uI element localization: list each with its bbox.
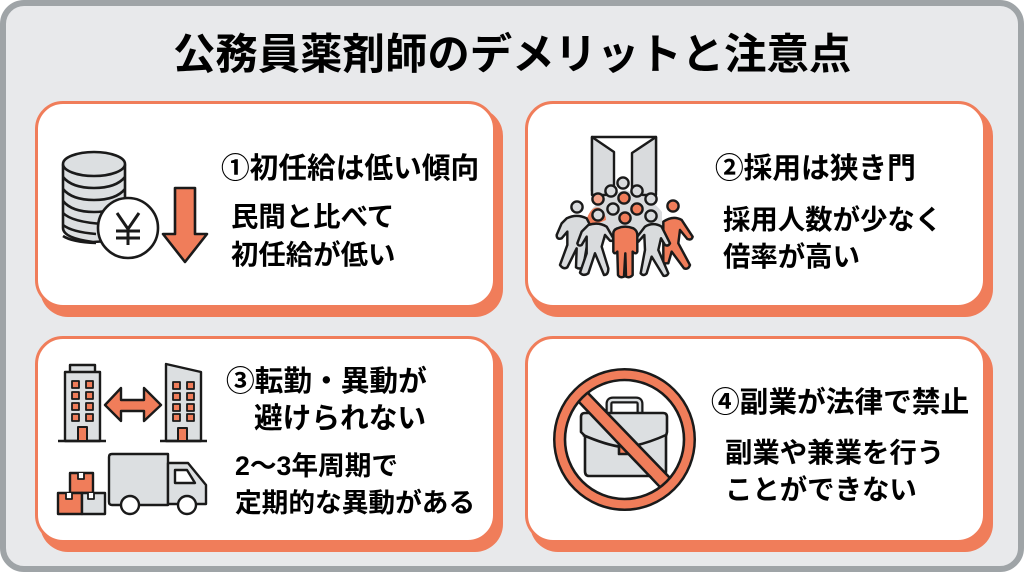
body text 3: 定期的な異動がある <box>235 488 475 518</box>
body text 1: 民間と比べて <box>231 201 394 232</box>
body text 4 <box>725 437 944 505</box>
card 3 shadow <box>40 343 503 552</box>
body text 2 <box>723 204 942 272</box>
body text 3: 2〜3年周期で <box>235 451 398 481</box>
heading 4: ④副業が法律で禁止 <box>711 387 969 419</box>
body text 2: 採用人数が少なく <box>723 204 942 235</box>
body text 4: 副業や兼業を行う <box>725 437 944 468</box>
card 1 <box>35 101 496 308</box>
heading 1: ①初任給は低い傾向 <box>221 153 479 185</box>
card 2 <box>525 101 986 308</box>
body text 1: 初任給が低い <box>231 239 395 270</box>
heading 3 <box>226 366 427 435</box>
body text 1 <box>231 201 395 270</box>
heading 2: ②採用は狭き門 <box>715 153 916 185</box>
card 2 shadow <box>530 108 993 317</box>
card 1 shadow <box>40 108 503 317</box>
heading 3: ③転勤・異動が <box>226 366 427 398</box>
card 3 <box>35 336 496 543</box>
heading 3: 避けられない <box>254 403 426 435</box>
body text 2: 倍率が高い <box>723 241 860 272</box>
title: 公務員薬剤師のデメリットと注意点 <box>173 31 851 78</box>
body text 4: ことができない <box>725 474 917 505</box>
card 4 shadow <box>530 343 993 552</box>
body text 3 <box>235 451 475 518</box>
card 4 <box>525 336 986 543</box>
